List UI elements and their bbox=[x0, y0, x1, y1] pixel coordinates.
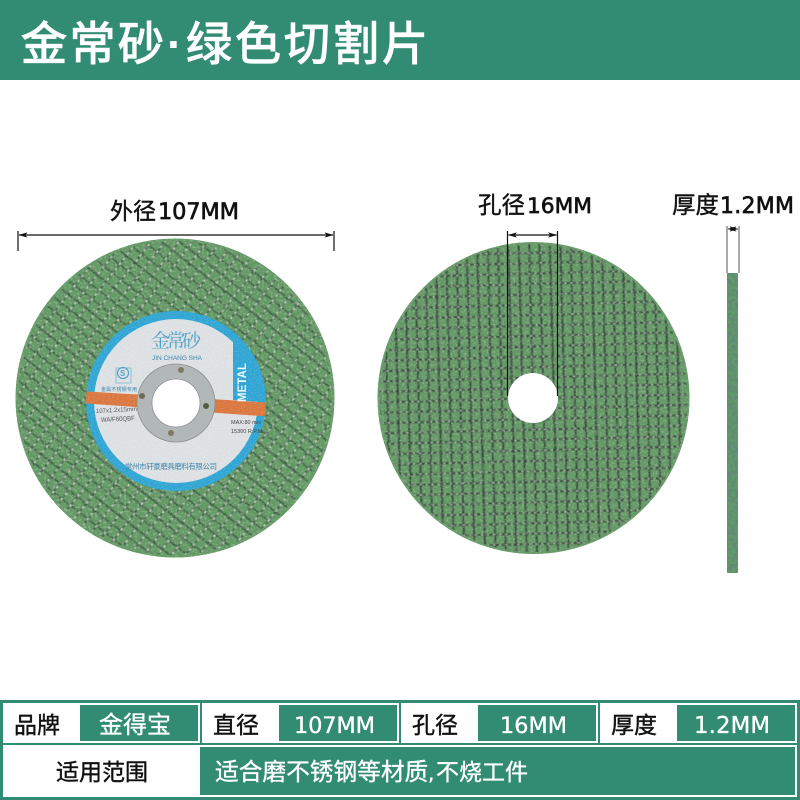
label text: 107x1.2x15mm bbox=[96, 406, 137, 415]
cell: application: , bbox=[428, 761, 434, 785]
cell: thickness: 1.2MM bbox=[694, 713, 770, 739]
cell: diameter: 107MM bbox=[294, 713, 375, 739]
header banner bbox=[0, 0, 800, 80]
cell: application bbox=[56, 753, 528, 787]
disc edge strip bbox=[727, 273, 738, 573]
label text: 金属不锈钢专用 bbox=[101, 386, 137, 393]
metal ring bbox=[137, 364, 215, 442]
title bbox=[21, 8, 431, 74]
label: thickness: 厚度 bbox=[672, 186, 719, 220]
cell: hole: 16MM bbox=[500, 713, 567, 739]
label text: 常州市轩豪磨具磨料有限公司 bbox=[125, 461, 217, 472]
disc: back of cutting wheel bbox=[378, 242, 690, 554]
icon: S logo: S bbox=[120, 369, 126, 378]
cell: hole bbox=[412, 706, 567, 740]
label text: METAL bbox=[237, 363, 249, 402]
cell: thickness bbox=[611, 706, 770, 740]
label text: 金常砂 bbox=[151, 326, 202, 353]
title: 绿色切割片 bbox=[186, 8, 431, 74]
label: outer diameter: 外径 bbox=[110, 192, 156, 226]
wheel label bbox=[80, 311, 275, 491]
icon: S logo bbox=[116, 368, 131, 383]
arrow: hole diameter dimension bbox=[508, 231, 558, 396]
arrow: outer diameter dimension bbox=[18, 231, 334, 251]
label: thickness bbox=[672, 186, 794, 220]
label: outer diameter: 107MM bbox=[158, 199, 239, 225]
label: thickness: 1.2MM bbox=[720, 194, 794, 219]
cell: brand bbox=[14, 705, 171, 740]
title: · bbox=[167, 18, 182, 70]
label text: MAX:80 m/s bbox=[231, 420, 261, 426]
cell: brand: 品牌 bbox=[14, 706, 60, 740]
cell: application: 不烧工件 bbox=[436, 753, 528, 787]
label: hole diameter: 16MM bbox=[527, 194, 592, 219]
label: outer diameter bbox=[110, 192, 239, 226]
cell: diameter: 直径 bbox=[213, 706, 259, 740]
cell: brand: 金得宝 bbox=[99, 705, 171, 740]
cell: thickness: 厚度 bbox=[611, 706, 657, 740]
label text: WA/F60QBF bbox=[101, 415, 135, 424]
label text: JIN CHANG SHA bbox=[152, 355, 203, 362]
title: 金常砂 bbox=[21, 8, 166, 74]
disc: labelled front of cutting wheel bbox=[16, 238, 334, 558]
arrow: thickness dimension bbox=[727, 226, 739, 273]
label: hole diameter bbox=[478, 186, 592, 220]
label text: 15300 R.P.M. bbox=[231, 429, 264, 435]
cell: hole: 孔径 bbox=[412, 706, 458, 740]
label: hole diameter: 孔径 bbox=[478, 186, 525, 220]
cell: application: 适合磨不锈钢等材质 bbox=[215, 753, 428, 787]
cell: diameter bbox=[213, 706, 375, 740]
label text bbox=[96, 326, 264, 472]
cell: application: 适用范围 bbox=[56, 753, 148, 787]
spec table bbox=[0, 700, 800, 800]
